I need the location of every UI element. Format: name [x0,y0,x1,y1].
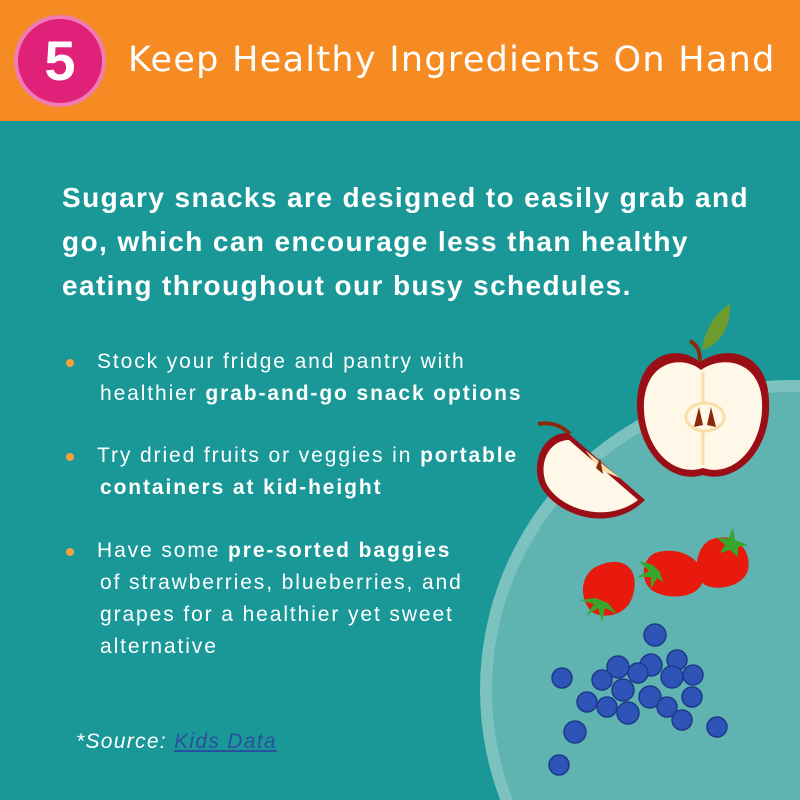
title: Keep Healthy Ingredients On Hand [128,40,776,80]
number badge: 5 [44,29,76,92]
header bar [0,0,800,121]
apple half [637,304,769,477]
bullet 2 [66,444,518,499]
bullet 3: grapes for a healthier yet sweet [100,603,454,626]
blueberries [549,624,727,775]
bullet 2: containers at kid-height [100,476,382,499]
source: *Source: Kids Data [76,730,277,753]
bullet 3: Have some pre-sorted baggies [97,539,451,562]
strawberries [580,528,749,622]
bullet 3: of strawberries, blueberries, and [100,571,463,594]
bullet 3: alternative [100,635,218,658]
lead text: Sugary snacks are designed to easily grab and [62,182,749,213]
apple slice [537,423,645,519]
number badge [14,15,106,107]
lead text: go, which can encourage less than healthy [62,226,689,257]
lead text [62,182,749,301]
bullet 1: healthier grab-and-go snack options [100,382,522,405]
bullet 2: Try dried fruits or veggies in portable [97,444,518,467]
bullet 3 [66,539,463,658]
plate [480,380,800,800]
bullet 1: Stock your fridge and pantry with [97,350,466,373]
lead text: eating throughout our busy schedules. [62,270,632,301]
bullet 1 [66,350,522,405]
